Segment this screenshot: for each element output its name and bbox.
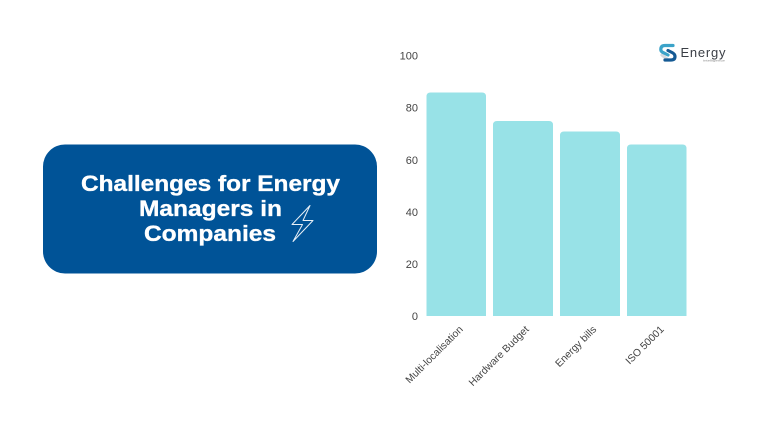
y axis labels: 20	[406, 259, 418, 271]
y axis labels	[400, 50, 418, 323]
y axis labels: 0	[412, 311, 418, 323]
panel: title banner	[43, 144, 377, 274]
x axis labels: Multi-localisation	[404, 324, 466, 386]
title: Managers in	[139, 196, 282, 221]
logo wordmark: Energy	[680, 45, 726, 60]
logo tagline: intelligence	[703, 58, 726, 62]
title: Challenges for Energy	[81, 171, 341, 196]
icon: logo mark	[661, 46, 675, 60]
title: Companies	[144, 221, 276, 246]
x axis labels	[404, 324, 667, 389]
y axis labels: 40	[406, 207, 418, 219]
logo: Energy	[661, 45, 726, 62]
bars	[426, 92, 686, 316]
y axis labels: 60	[406, 155, 418, 167]
x axis labels: Energy bills	[554, 324, 599, 370]
icon: lightning bolt	[292, 206, 313, 242]
title	[81, 171, 341, 246]
bar chart	[400, 50, 686, 389]
x axis labels: ISO 50001	[624, 324, 667, 367]
x axis labels: Hardware Budget	[467, 324, 532, 389]
y axis labels: 80	[406, 102, 418, 114]
y axis labels: 100	[400, 50, 418, 62]
